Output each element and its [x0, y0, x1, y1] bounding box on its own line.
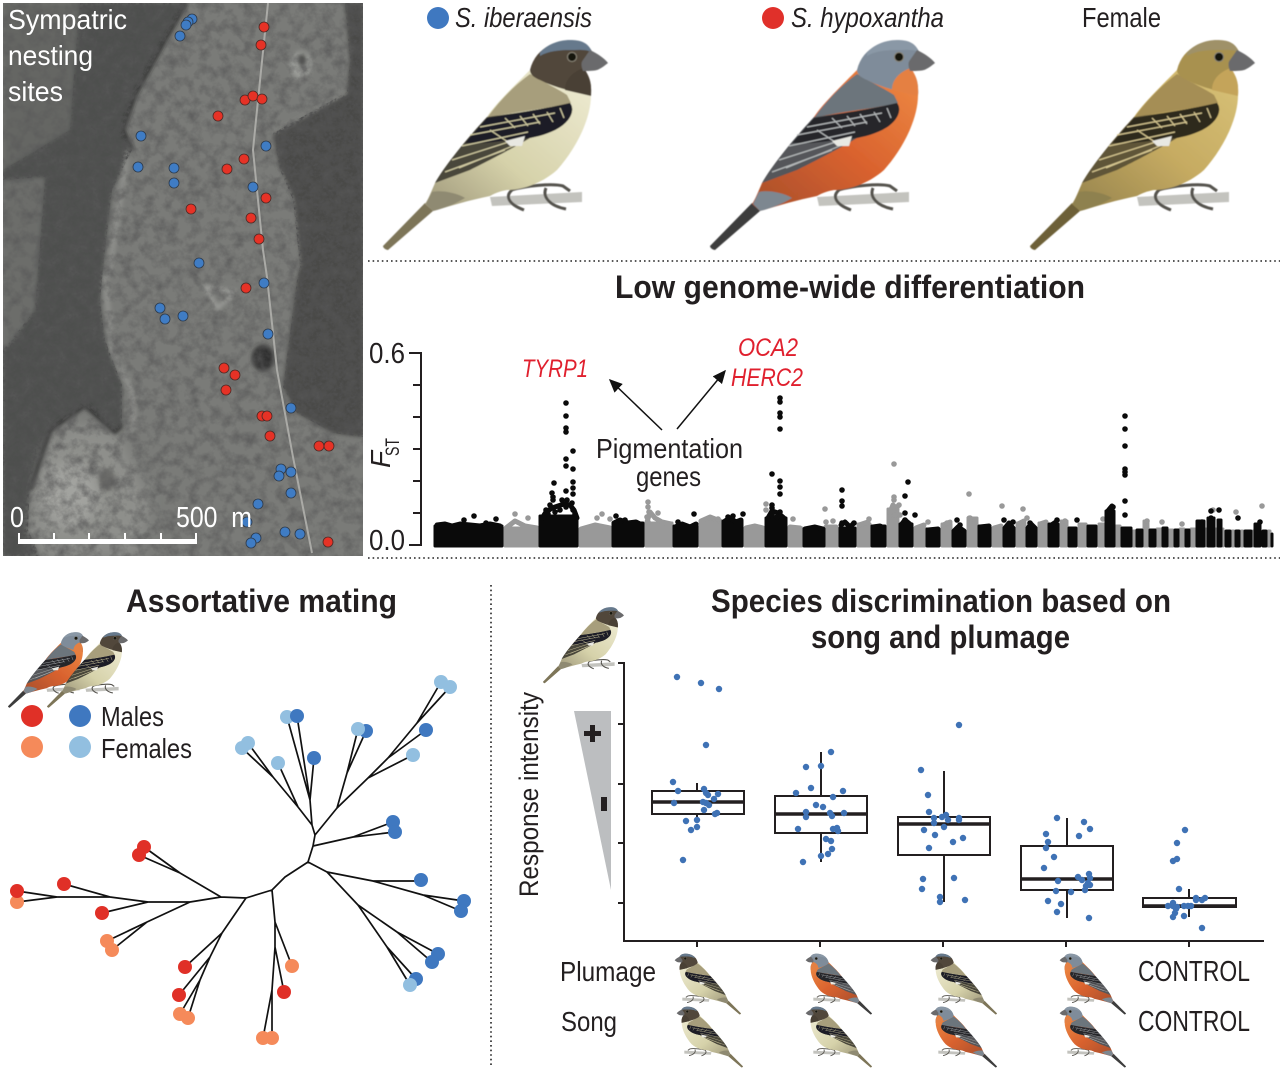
song row birds	[677, 1007, 1126, 1068]
map title: Sympatric	[8, 4, 127, 35]
legend: males and females: Females	[101, 733, 192, 764]
bird on y axis	[543, 607, 624, 683]
panel: map of sympatric nesting sites	[3, 3, 363, 556]
row label: Song: Song	[561, 1006, 617, 1037]
blue tips	[235, 675, 471, 992]
y axis: 0.6	[369, 338, 405, 370]
gene labels: OCA2	[738, 334, 798, 362]
scale bar: 0	[10, 502, 24, 534]
species label: S. iberaensis: S. iberaensis	[455, 2, 592, 33]
y axis label: Response intensity	[514, 692, 544, 897]
map terrain	[3, 3, 363, 556]
control labels: CONTROL	[1138, 1006, 1250, 1038]
box 1	[652, 677, 744, 860]
heading: species discrimination: song and plumage	[811, 619, 1070, 655]
tree branches	[17, 682, 464, 1038]
heading: assortative mating: Assortative mating	[126, 583, 397, 619]
bird: S. hypoxantha male	[710, 40, 935, 250]
bird: female	[1030, 40, 1255, 250]
y axis	[365, 338, 421, 557]
chart: FST Manhattan plot	[365, 334, 1272, 557]
scale bar	[10, 502, 252, 544]
map background	[3, 3, 363, 556]
map title: nesting	[8, 40, 93, 71]
axes	[618, 663, 1264, 947]
gene labels: TYRP1	[522, 355, 588, 383]
y axis: 0.0	[369, 525, 405, 557]
gray chromosomes	[505, 464, 1270, 546]
row label: Plumage: Plumage	[560, 956, 656, 987]
chart: response box plot	[618, 663, 1264, 947]
red and orange tips	[10, 840, 299, 1045]
y axis: F	[365, 449, 396, 468]
control labels: CONTROL	[1138, 956, 1250, 988]
gene labels	[522, 334, 803, 392]
box 4	[1021, 818, 1113, 918]
box 3	[898, 725, 990, 902]
legend: males and females	[21, 701, 192, 764]
pigmentation genes label: Pigmentation	[596, 433, 743, 464]
map title: sites	[8, 76, 63, 107]
heading: species discrimination: Species discrimination based on	[711, 583, 1171, 619]
box 5	[1143, 830, 1236, 928]
species label: Female: Female	[1082, 2, 1161, 33]
legend: males and females: Males	[101, 701, 164, 732]
arrow: to TYRP1	[610, 380, 662, 430]
legend birds	[8, 632, 128, 708]
heading: species discrimination	[711, 583, 1171, 655]
scale bar: 500 m	[176, 502, 252, 534]
plumage row birds	[675, 954, 1126, 1014]
y axis: ST	[383, 438, 404, 456]
black chromosomes	[435, 398, 1272, 546]
bird: S. iberaensis male	[383, 40, 608, 250]
arrow: to OCA2 HERC2	[677, 371, 725, 429]
blue nesting sites	[133, 14, 305, 548]
heading: low genome-wide differentiation: Low genome-wide differentiation	[615, 269, 1085, 305]
phylogenetic tree	[10, 675, 471, 1045]
map title	[8, 4, 127, 107]
pigmentation genes label	[596, 433, 743, 492]
species label: S. hypoxantha: S. hypoxantha	[791, 2, 944, 33]
box 2	[775, 752, 867, 862]
control labels	[1138, 956, 1250, 1038]
red nesting sites	[186, 22, 334, 547]
pigmentation genes label: genes	[636, 461, 701, 492]
intensity wedge	[574, 711, 611, 890]
gene labels: HERC2	[731, 364, 803, 392]
